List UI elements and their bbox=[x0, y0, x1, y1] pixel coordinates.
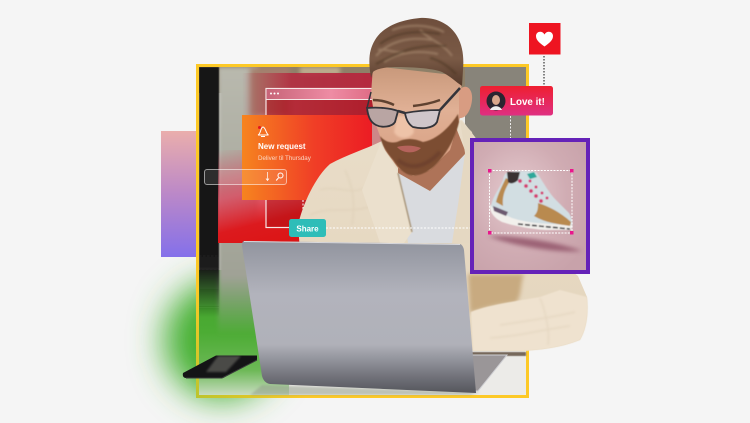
dotted connector: share bbox=[326, 227, 470, 229]
love it badge: Love it! bbox=[510, 97, 545, 108]
table shadow under arm bbox=[472, 352, 526, 356]
green glow bbox=[164, 280, 280, 400]
phone bbox=[183, 356, 257, 378]
glasses bbox=[367, 88, 460, 128]
t-shirt bbox=[398, 152, 470, 243]
photo background inside frame bbox=[199, 67, 526, 395]
nose bbox=[394, 116, 414, 138]
neck bbox=[398, 125, 466, 191]
share button bbox=[289, 219, 326, 237]
sleeve forearm bbox=[471, 290, 588, 351]
laptop base bbox=[470, 355, 507, 391]
selection box bbox=[488, 169, 574, 234]
hair bbox=[369, 18, 463, 86]
search box bbox=[204, 170, 286, 184]
eyebrows bbox=[373, 100, 440, 106]
shirt torso bbox=[298, 120, 588, 351]
avatar bbox=[486, 92, 506, 110]
notification card bbox=[242, 115, 372, 200]
beard bbox=[380, 114, 459, 176]
shirt creases bbox=[310, 170, 575, 345]
collar right bbox=[452, 120, 475, 243]
red panel bbox=[218, 73, 382, 243]
laptop bbox=[242, 241, 526, 395]
illustration: man at laptop with interface cards bbox=[136, 18, 590, 423]
dotted vertical: share connector bbox=[302, 200, 304, 219]
dotted connector: reaction bbox=[510, 116, 512, 138]
man bbox=[298, 18, 588, 351]
lips bbox=[397, 146, 421, 152]
shirt fold shading bbox=[468, 274, 524, 313]
collar left shadow bbox=[398, 173, 412, 232]
shoe shadow bbox=[488, 236, 582, 251]
laptop lid bbox=[242, 241, 476, 393]
icon: bell bbox=[258, 126, 268, 136]
shoe bbox=[490, 171, 572, 230]
lid top rim bbox=[244, 242, 460, 244]
notification detail: Deliver til Thursday bbox=[258, 155, 312, 162]
hair highlights bbox=[376, 26, 452, 62]
ear bbox=[459, 87, 472, 118]
heart tile bbox=[529, 23, 560, 54]
shadow under laptop bbox=[250, 385, 480, 395]
icon: heart bbox=[536, 32, 553, 46]
dotted connector: heart bbox=[543, 56, 545, 86]
product panel bbox=[472, 140, 588, 272]
browser window outline bbox=[266, 88, 396, 228]
share button: Share bbox=[296, 224, 319, 234]
yellow frame bbox=[196, 66, 528, 398]
beard shading bbox=[398, 152, 440, 166]
gradient panel left bbox=[161, 131, 197, 257]
face bbox=[371, 66, 462, 176]
hair dark streaks bbox=[376, 32, 456, 74]
collar left bbox=[362, 142, 412, 243]
love it badge bbox=[480, 86, 553, 116]
notification heading: New request bbox=[258, 142, 306, 151]
